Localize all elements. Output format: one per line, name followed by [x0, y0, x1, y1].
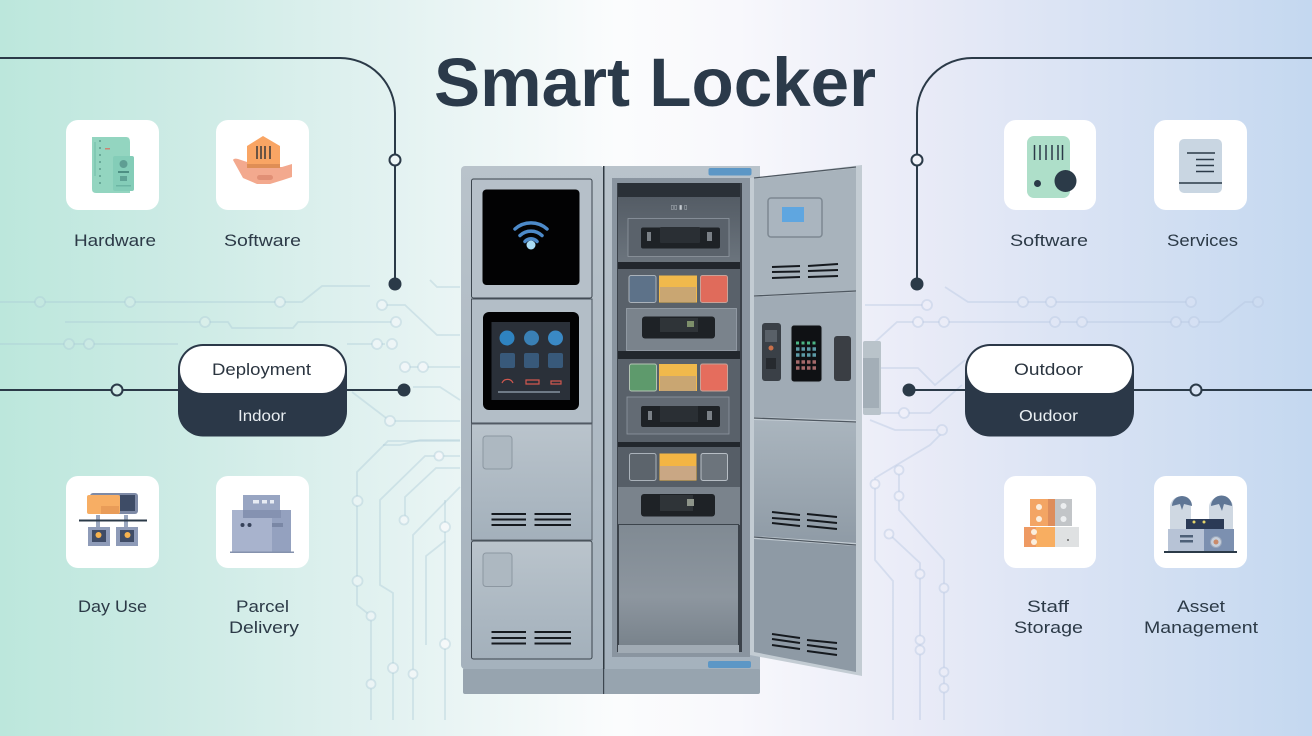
icon: green device [1027, 136, 1076, 198]
pill: Deployment / Indoor [178, 344, 347, 436]
connector: right middle [902, 384, 1312, 396]
wifi screen [482, 190, 580, 285]
label: Software: Software [1010, 231, 1088, 250]
blue tags [708, 168, 752, 668]
pill: Outdoor / Oudoor [965, 344, 1134, 436]
icon: hardware card [92, 137, 134, 193]
interior shelves: ▯▯ ▮ ▯ [671, 205, 687, 211]
card: Software (left) [216, 120, 309, 250]
door keypad devices [762, 323, 851, 382]
pill: Outdoor / Oudoor: Outdoor [1014, 360, 1083, 379]
card: Services [1154, 120, 1247, 250]
card: Day Use [66, 476, 159, 616]
label: Hardware: Hardware [74, 231, 156, 250]
label: Parcel Delivery: Parcel [236, 597, 289, 616]
locker latches [483, 436, 512, 586]
label: Staff Storage: Staff [1027, 597, 1069, 616]
connector: left top [0, 58, 402, 290]
left locker column [461, 166, 604, 669]
open door [750, 165, 862, 676]
label: Software: Software [224, 231, 301, 250]
interior shelves [618, 183, 740, 653]
label: Asset Management: Asset [1177, 597, 1225, 616]
title: Smart Locker [434, 44, 876, 121]
door side handle [863, 341, 881, 415]
label: Asset Management: Management [1144, 618, 1258, 637]
label: Services: Services [1167, 231, 1238, 250]
circuit traces: left [0, 280, 460, 720]
connector: right top [910, 58, 1312, 290]
locker plinth [463, 668, 760, 694]
smart locker illustration [461, 165, 881, 694]
icon: delivery building [230, 495, 294, 553]
pill: Deployment / Indoor: Indoor [238, 408, 287, 425]
icon: network of lockers [79, 493, 147, 546]
label: Parcel Delivery: Delivery [229, 618, 300, 637]
door vents [772, 264, 838, 655]
icon: stacked boxes [1024, 499, 1079, 547]
card: Asset Management [1144, 476, 1258, 637]
icon: document [1179, 139, 1222, 193]
door status display [768, 198, 822, 237]
card: Staff Storage [1004, 476, 1096, 637]
center frame [603, 166, 760, 669]
icon: machinery [1164, 496, 1237, 553]
circuit traces: right [865, 287, 1263, 720]
pill: Deployment / Indoor: Deployment [212, 360, 311, 379]
label: Day Use: Day Use [78, 597, 147, 616]
label: Staff Storage: Storage [1014, 618, 1083, 637]
interior colour tiles [629, 276, 728, 480]
interior locks [641, 227, 720, 516]
icon: parcel on hand [233, 136, 292, 184]
touch screen [483, 312, 579, 410]
pill: Outdoor / Oudoor: Oudoor [1019, 408, 1079, 425]
card: Software (right) [1004, 120, 1096, 250]
card: Parcel Delivery [216, 476, 309, 637]
card: Hardware [66, 120, 159, 250]
left column vents [492, 514, 571, 644]
connector: left middle [0, 384, 410, 396]
